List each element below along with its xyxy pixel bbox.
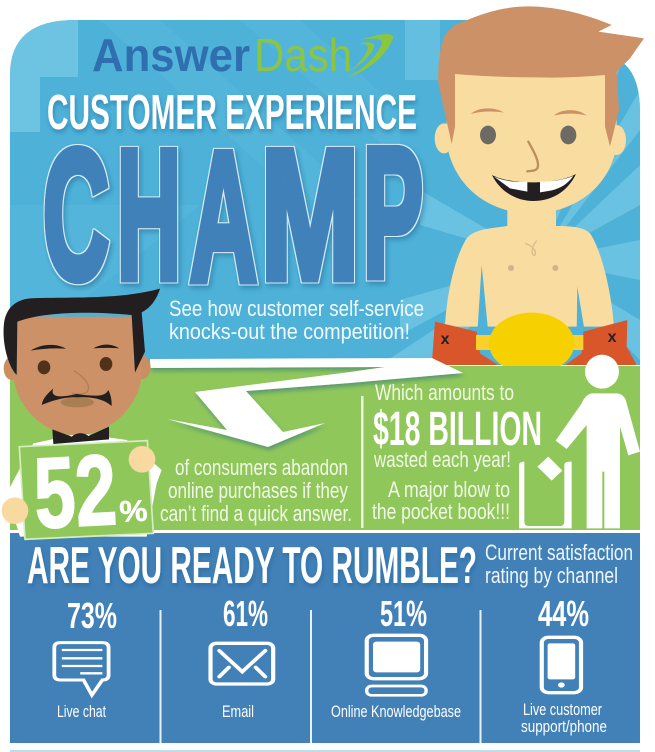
text: wasted money statistic: $18 BILLION [373,403,542,456]
icon: lightning bolt [150,358,463,447]
text: wasted money statistic [372,380,542,524]
logo: AnswerDash: Dash [254,29,352,81]
moustache [61,397,94,407]
belt [476,335,583,350]
text: wasted money statistic: wasted each year! [373,447,511,472]
bow tie [52,427,109,444]
text: satisfaction caption [485,540,633,588]
ears and face [435,123,453,153]
text: wasted money statistic: Which amounts to [375,380,514,405]
text: satisfaction caption: rating by channel [485,563,618,588]
text: wasted money statistic: the pocket book!!! [372,499,510,524]
heading: Customer Experience: CUSTOMER EXPERIENCE [47,86,417,140]
face [13,317,142,435]
hair [438,6,644,147]
illustration: champion boy: x [441,331,450,348]
channel: live chat [54,595,117,721]
channel: email: 61% [223,593,268,634]
channel: email [211,593,273,721]
illustration: man with moustache [2,289,162,539]
hair [4,289,160,375]
torso [445,200,614,327]
channel: live customer support [521,593,607,736]
text: tagline: See how customer self-service [169,296,424,321]
heading: CHAMP: C [43,111,109,317]
text: P [363,109,423,315]
text: wasted money statistic: A major blow to [388,477,510,502]
text: tagline: knocks-out the competition! [169,319,410,344]
nose [527,142,538,171]
panel: hero background [10,20,640,365]
text: abandon statistic: of consumers abandon [175,455,348,480]
illustration: champion boy [432,6,644,374]
divider [361,396,364,528]
heading: CHAMP: A [190,113,257,319]
text: tagline [169,296,424,344]
boxing gloves [432,320,637,365]
brows and eyes [471,108,587,116]
panel: green statistics band [10,366,640,530]
logo: AnswerDash [92,29,393,81]
icon: person throwing money in trash [519,355,640,528]
footer rule [10,750,640,752]
shirt [7,433,162,537]
text: abandon statistic: online purchases if they [168,478,348,503]
illustration: champion boy: x [608,329,617,346]
nose [72,371,89,394]
channel: live chat: Live chat [57,702,106,721]
channel: email: Email [222,702,254,721]
text: abandon statistic: can’t find a quick answer. [160,501,352,526]
mouth [492,174,576,201]
stat: 52%: 52 [31,433,119,550]
channel: online knowledgebase: Online Knowledgebase [331,702,461,721]
channel: live chat: 73% [67,595,117,636]
panel: satisfaction band [10,533,640,743]
hands [129,446,155,473]
heading: CHAMP [43,109,423,319]
text: abandon statistic [160,455,352,526]
column dividers [160,610,482,743]
channel: live customer support: support/phone [521,717,607,736]
ears [4,357,20,380]
channel: online knowledgebase: 51% [380,593,427,634]
stat: 52%: % [119,495,148,529]
logo: AnswerDash: Answer [92,29,250,81]
channel: live customer support: Live customer [523,700,602,719]
heading: CHAMP: H [117,111,181,317]
channel: online knowledgebase [331,593,461,721]
brows and eyes [31,345,119,351]
channel: live customer support: 44% [538,593,589,634]
card [19,441,153,539]
heading: CHAMP: M [261,111,359,317]
